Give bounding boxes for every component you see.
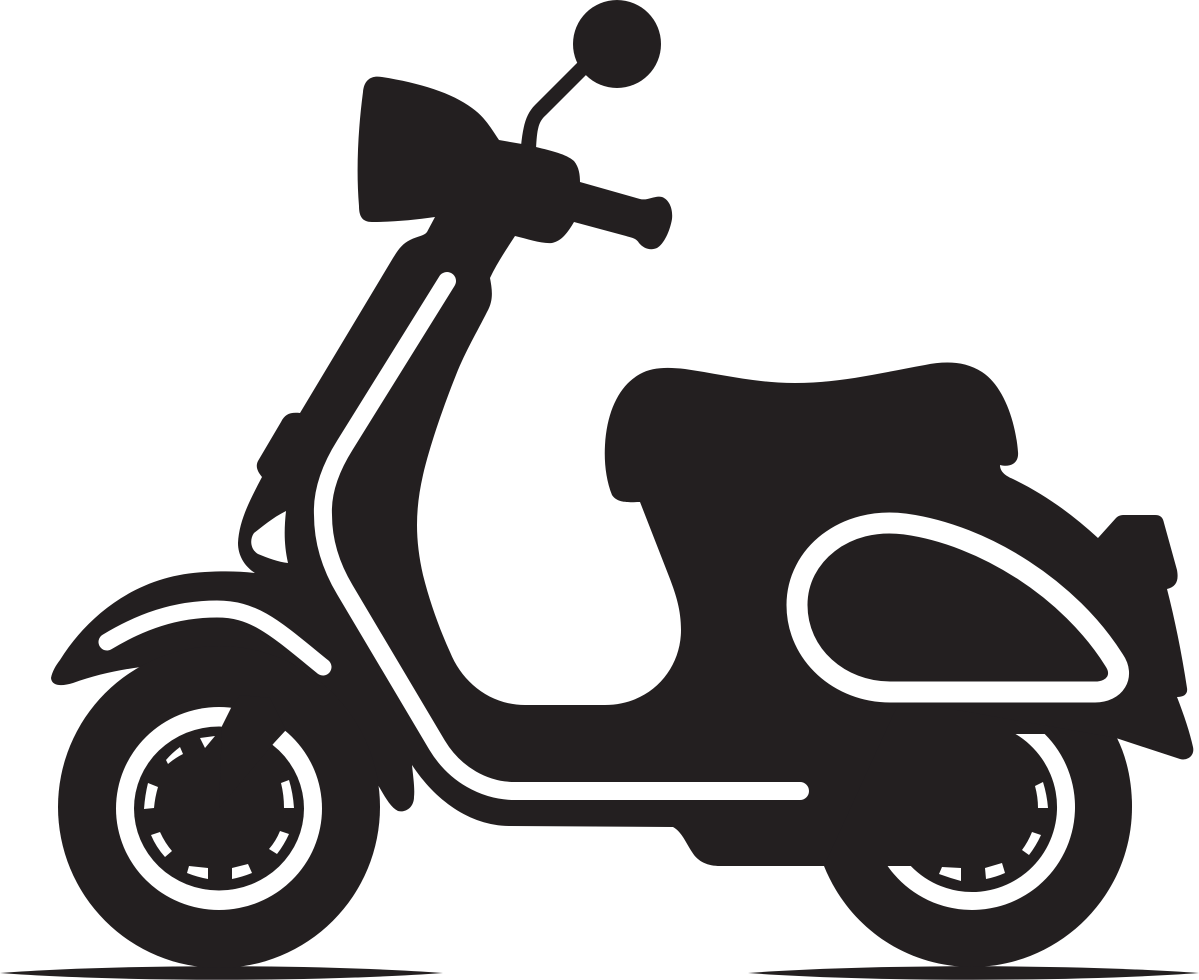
front rim dashes [144,736,294,879]
ground shadow: right [748,966,1199,980]
white fender line [107,609,323,667]
scooter body silhouette [51,77,1193,866]
mirror [521,0,661,149]
rear rim dashes [939,782,1048,881]
white frame line [323,281,800,791]
white leg-shield cutout [251,511,288,563]
front wheel [58,646,380,968]
front rim ring [116,695,322,910]
rear rim crescent [888,734,1075,910]
white tank outline [797,523,1119,692]
ground shadow: left [0,966,443,980]
rear wheel [824,700,1132,967]
